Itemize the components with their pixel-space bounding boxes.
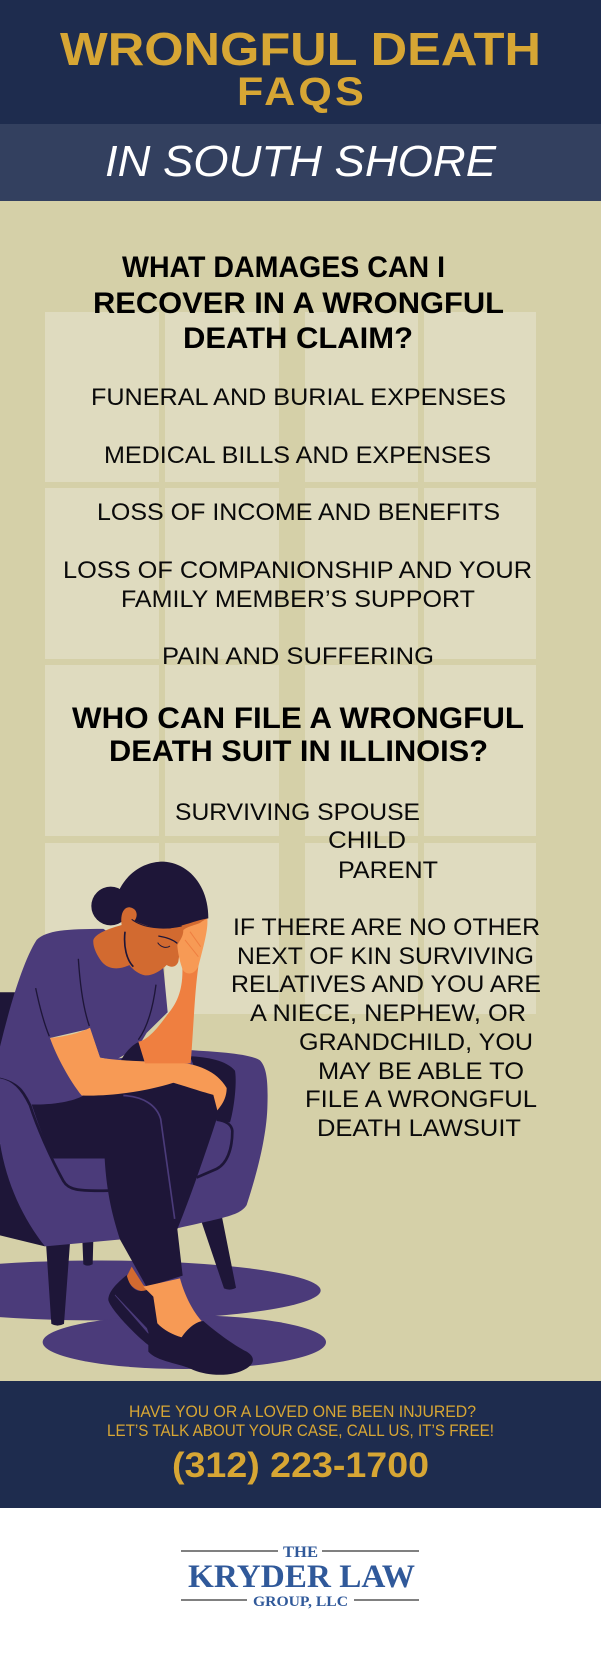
panel: call to action footer: LET’S TALK ABOUT YOUR CASE, CALL US, IT’S FREE! xyxy=(107,1422,494,1440)
title: FAQS xyxy=(237,70,367,114)
text block: next of kin: A NIECE, NEPHEW, OR xyxy=(250,1000,526,1027)
text block: next of kin: IF THERE ARE NO OTHER xyxy=(233,914,540,941)
panel: location subheader: IN SOUTH SHORE xyxy=(105,137,497,186)
list: who can file xyxy=(175,799,438,884)
text block: next of kin: RELATIVES AND YOU ARE xyxy=(231,971,541,998)
window panes xyxy=(45,312,536,1014)
text block: next of kin xyxy=(231,914,541,1142)
heading: who can file question xyxy=(72,702,524,768)
panel: cream background xyxy=(0,201,601,1381)
heading: who can file question: DEATH SUIT IN ILLINOIS? xyxy=(109,735,488,768)
panel: call to action footer xyxy=(0,1381,601,1508)
list: recoverable damages: MEDICAL BILLS AND EXPENSES xyxy=(104,442,491,469)
heading: damages question: WHAT DAMAGES CAN I xyxy=(122,251,445,284)
title xyxy=(60,23,541,114)
logo: The Kryder Law Group xyxy=(181,1544,419,1610)
text block: next of kin: NEXT OF KIN SURVIVING xyxy=(237,943,534,970)
heading: damages question: RECOVER IN A WRONGFUL xyxy=(93,287,504,320)
forearm, face and hair xyxy=(91,862,208,1063)
list: recoverable damages: FAMILY MEMBER’S SUPPORT xyxy=(121,586,475,613)
panel: location subheader xyxy=(0,124,601,201)
heading: who can file question: WHO CAN FILE A WRONGFUL xyxy=(72,702,524,735)
heading: damages question xyxy=(93,251,504,355)
illustration: grieving woman in armchair xyxy=(0,862,326,1375)
logo: The Kryder Law Group: THE xyxy=(283,1544,318,1561)
heading: damages question: DEATH CLAIM? xyxy=(183,322,413,355)
list: recoverable damages xyxy=(63,384,532,670)
list: who can file: SURVIVING SPOUSE xyxy=(175,799,420,826)
panel: header xyxy=(0,0,601,124)
feet and shoes xyxy=(108,1267,253,1375)
panel: call to action footer: HAVE YOU OR A LOVED ONE BEEN INJURED? xyxy=(129,1403,476,1421)
text block: next of kin: GRANDCHILD, YOU xyxy=(299,1029,533,1056)
list: recoverable damages: LOSS OF COMPANIONSHIP AND YOUR xyxy=(63,557,532,584)
list: recoverable damages: FUNERAL AND BURIAL EXPENSES xyxy=(91,384,506,411)
logo: The Kryder Law Group: GROUP, LLC xyxy=(253,1594,348,1610)
list: who can file: PARENT xyxy=(338,857,438,884)
list: recoverable damages: PAIN AND SUFFERING xyxy=(162,643,434,670)
list: who can file: CHILD xyxy=(328,827,406,854)
text block: next of kin: DEATH LAWSUIT xyxy=(317,1115,521,1142)
text block: next of kin: MAY BE ABLE TO xyxy=(318,1058,524,1085)
phone number: (312) 223-1700 xyxy=(172,1446,429,1485)
title: WRONGFUL DEATH xyxy=(60,23,541,75)
list: recoverable damages: LOSS OF INCOME AND BENEFITS xyxy=(97,499,500,526)
logo: The Kryder Law Group: KRYDER LAW xyxy=(188,1559,415,1595)
text block: next of kin: FILE A WRONGFUL xyxy=(305,1086,537,1113)
